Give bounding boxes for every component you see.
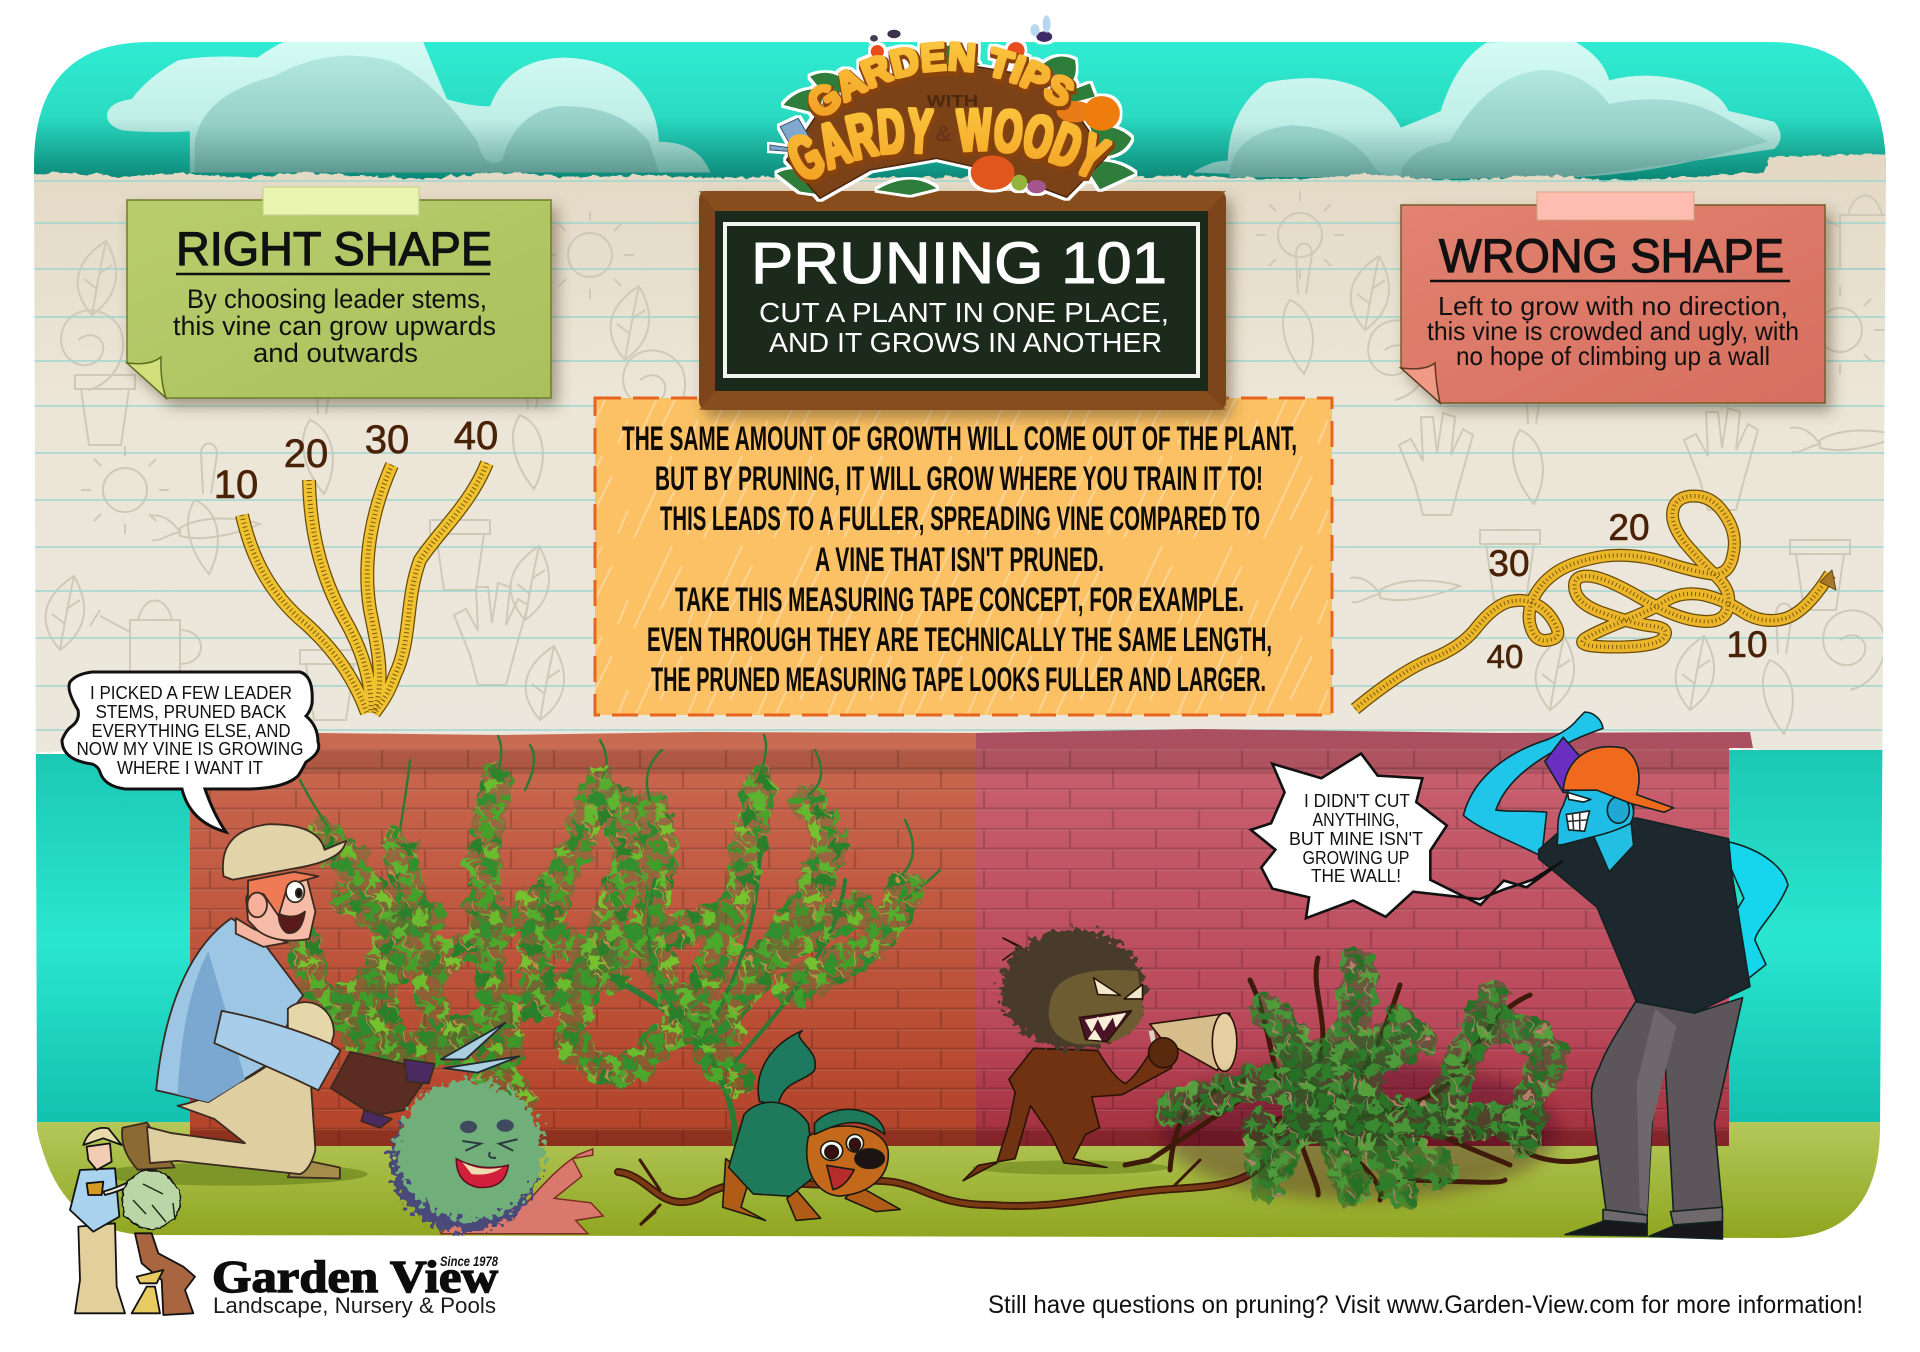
back boot <box>122 1122 175 1170</box>
measuring tape: tangled <box>1355 496 1836 709</box>
explanation text: BUT BY PRUNING, IT WILL GROW WHERE YOU TRAIN IT TO! <box>655 460 1263 498</box>
character: gardener with shears <box>98 824 519 1186</box>
explanation text: THIS LEADS TO A FULLER, SPREADING VINE COMPARED TO <box>660 500 1260 538</box>
bubble text: NOW MY VINE IS GROWING <box>76 739 304 759</box>
flowers <box>864 42 1025 71</box>
tape length labels: right shape <box>214 414 498 507</box>
bubble text: WHERE I WANT IT <box>117 758 263 778</box>
explanation text: A VINE THAT ISN'T PRUNED. <box>815 541 1104 579</box>
board subheading line 2: AND IT GROWS IN ANOTHER <box>769 327 1162 358</box>
torn paper sheet <box>10 153 1900 758</box>
logo title: with: WITH <box>927 92 978 111</box>
tangled roots <box>1125 958 1620 1200</box>
sticky note: right shape <box>127 187 551 398</box>
note body: this vine is crowded and ugly, with <box>1427 316 1799 346</box>
chalkboard title <box>699 191 1226 410</box>
angry eye <box>1568 792 1591 802</box>
head <box>246 875 315 941</box>
logo name: woody <box>958 150 1098 183</box>
explanation text <box>622 420 1297 699</box>
tape length labels: wrong shape: 40 <box>1487 638 1523 675</box>
tape length labels: right shape: 10 <box>214 463 258 507</box>
neck <box>1594 819 1634 872</box>
vine: unpruned, tangled on the ground <box>1125 958 1620 1200</box>
monster body and branch <box>963 938 1174 1181</box>
note body: Left to grow with no direction, <box>1438 291 1788 321</box>
bubble text <box>76 683 304 778</box>
left arm raised <box>1463 712 1603 856</box>
bubble text: BUT MINE ISN'T <box>1289 829 1423 849</box>
brand name: Garden View <box>212 1251 498 1302</box>
note body <box>173 284 496 368</box>
scissors blades <box>441 1023 519 1073</box>
pumpkin <box>971 155 1015 190</box>
note body: By choosing leader stems, <box>187 284 487 314</box>
forearm <box>214 1011 340 1090</box>
wall cap right <box>976 729 1753 748</box>
gloves <box>331 1052 426 1115</box>
tape length labels: right shape: 30 <box>365 418 409 462</box>
tape length labels: wrong shape: 30 <box>1488 543 1530 584</box>
wall cap left <box>196 732 976 749</box>
neck <box>236 918 288 947</box>
dog head <box>807 1126 888 1196</box>
logo name: gardy <box>803 152 938 183</box>
stick held by dog <box>618 1120 1280 1225</box>
fuzzy head <box>1001 929 1145 1049</box>
mouth <box>279 912 305 933</box>
company mascot logo <box>70 1128 195 1315</box>
dog eyes and nose <box>821 1141 843 1160</box>
note paper <box>127 200 551 398</box>
teeth <box>1566 811 1590 831</box>
board frame <box>699 191 1226 410</box>
note body: no hope of climbing up a wall <box>1456 341 1770 371</box>
logo: Garden Tips with Gardy and Woody <box>767 15 1138 202</box>
fuzzy fringe <box>390 1088 542 1232</box>
character: smiling green bush monster <box>390 1080 603 1234</box>
ground <box>30 1122 1890 1240</box>
garden produce <box>1011 175 1027 191</box>
bubble text: ANYTHING, <box>1312 810 1400 830</box>
leaf masses <box>1174 964 1548 1190</box>
tape length labels: wrong shape <box>1487 507 1768 675</box>
note paper <box>1401 205 1825 403</box>
cloud: left <box>107 40 710 172</box>
shirt <box>156 918 303 1102</box>
dog legs <box>723 1159 900 1220</box>
head <box>1557 788 1634 845</box>
logo: Garden Tips with Gardy and Woody: GARDY <box>785 107 936 184</box>
roots body <box>441 1149 603 1234</box>
wooden sign <box>787 63 1107 198</box>
bubble text: I PICKED A FEW LEADER <box>90 683 292 703</box>
character: frustrated blue man <box>1463 712 1788 1239</box>
tape length labels: wrong shape: 10 <box>1726 624 1768 665</box>
explanation text: EVEN THROUGH THEY ARE TECHNICALLY THE SAME LENGTH, <box>647 621 1272 659</box>
bubble text <box>1289 791 1423 886</box>
explanation text: TAKE THIS MEASURING TAPE CONCEPT, FOR EXAMPLE. <box>675 581 1244 619</box>
white cut bottom-left <box>30 1196 74 1238</box>
cloud: right <box>1193 40 1781 180</box>
background doodles <box>46 191 1911 734</box>
shoes <box>1565 1221 1722 1239</box>
mascot figure <box>70 1128 195 1315</box>
footer call to action: Still have questions on pruning? Visit www.Garden-View.com for more information! <box>988 1291 1863 1319</box>
far arm <box>1714 842 1788 982</box>
note heading: RIGHT SHAPE <box>176 222 492 275</box>
bubble text: STEMS, PRUNED BACK <box>96 702 286 722</box>
note tape <box>1537 192 1694 220</box>
note body: and outwards <box>253 338 418 368</box>
brand tagline: Landscape, Nursery & Pools <box>213 1293 496 1318</box>
tape length labels: right shape: 20 <box>284 432 328 476</box>
shadow <box>98 1163 367 1186</box>
bubble shape <box>1251 754 1563 918</box>
note body <box>1427 291 1799 371</box>
brick wall <box>190 729 1753 1146</box>
speech bubble: frustrated man <box>1251 754 1563 918</box>
orange cap <box>1563 747 1673 812</box>
pruned side wall <box>190 748 980 1146</box>
logo: Garden Tips with Gardy and Woody: WOODY <box>955 107 1115 184</box>
purple hair and fingers <box>1545 737 1634 810</box>
panel: explanation box <box>595 398 1332 715</box>
knee <box>288 1002 334 1086</box>
character: angry brown monster with megaphone <box>963 929 1237 1181</box>
chalk border <box>725 224 1198 376</box>
wall shadow <box>1160 1060 1560 1200</box>
bees <box>870 15 1052 42</box>
face <box>456 1119 517 1188</box>
eye <box>286 881 304 902</box>
explanation text: THE SAME AMOUNT OF GROWTH WILL COME OUT OF THE PLANT, <box>622 420 1297 458</box>
logo foliage <box>777 46 1135 195</box>
hat <box>223 824 346 880</box>
unpruned side wall <box>976 748 1729 1146</box>
logo ampersand: & <box>935 121 952 147</box>
note heading: WRONG SHAPE <box>1439 229 1784 282</box>
bubble text: THE WALL! <box>1311 866 1401 886</box>
company name <box>212 1251 498 1318</box>
bubble text: GROWING UP <box>1302 848 1410 868</box>
explanation text: THE PRUNED MEASURING TAPE LOOKS FULLER AND LARGER. <box>651 661 1266 699</box>
tape length labels: wrong shape: 20 <box>1608 507 1650 548</box>
teal wall background right <box>1725 750 1890 1126</box>
watering can <box>770 118 810 153</box>
dog body fur <box>729 1102 814 1196</box>
logo title: garden tips <box>820 70 1070 120</box>
board surface <box>715 211 1208 391</box>
tape length labels: right shape: 40 <box>454 414 498 458</box>
shirt torso <box>1539 818 1750 1013</box>
measuring tape: pruned, spreading <box>242 463 487 713</box>
sticky note: wrong shape <box>1401 192 1825 403</box>
note corner fold <box>1401 363 1440 403</box>
front foot <box>288 1159 340 1179</box>
note corner fold <box>127 357 166 398</box>
ear <box>247 893 267 917</box>
mascot bush head <box>122 1171 180 1229</box>
board subheading line 1: CUT A PLANT IN ONE PLACE, <box>759 297 1169 328</box>
hair <box>248 872 318 916</box>
bubble text: EVERYTHING ELSE, AND <box>92 721 291 741</box>
bubble shape <box>62 672 319 832</box>
mushrooms <box>1057 101 1093 122</box>
monster face and megaphone <box>1049 970 1237 1071</box>
bubble text: I DIDN'T CUT <box>1304 791 1410 811</box>
note body: this vine can grow upwards <box>173 311 496 341</box>
since date: Since 1978 <box>440 1253 498 1269</box>
teal wall background left <box>34 754 194 1126</box>
vine: pruned, growing up the wall <box>300 735 940 1143</box>
dog ear fur <box>814 1109 885 1134</box>
board heading: PRUNING 101 <box>751 231 1167 296</box>
trousers <box>1591 998 1743 1215</box>
logo: Garden Tips with Gardy and Woody: GARDEN TIPS <box>808 41 1080 120</box>
speech bubble: gardener <box>62 672 319 832</box>
trouser leg <box>147 1048 315 1174</box>
note tape <box>263 187 419 215</box>
dog tail <box>758 1031 815 1106</box>
sky <box>20 30 1900 185</box>
character: dog with stick <box>723 1031 900 1220</box>
